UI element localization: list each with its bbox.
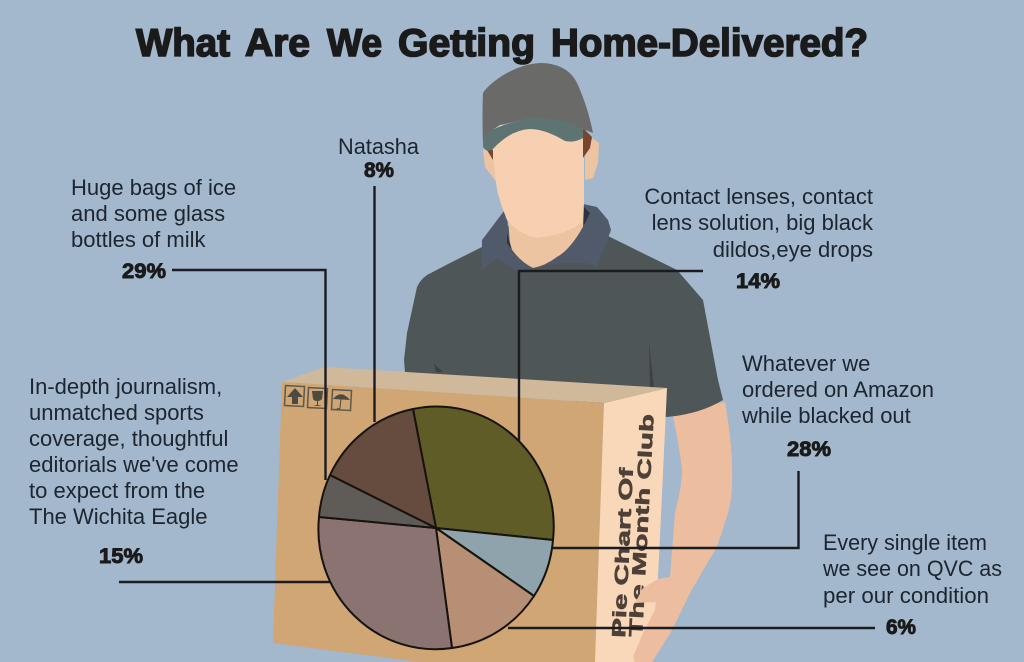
slice: mauve	[318, 517, 452, 649]
label: ice and milk	[71, 175, 236, 283]
delivery man illustration	[404, 63, 732, 662]
box handling icons	[284, 386, 352, 411]
box side label	[609, 413, 659, 638]
label: Amazon: 28%	[787, 438, 831, 461]
collar shadow	[507, 207, 590, 250]
cap	[482, 63, 593, 147]
shirt folds	[434, 342, 654, 388]
slice: brown	[330, 409, 436, 528]
title: Home-Delivered?	[551, 22, 868, 65]
label: QVC: we see on QVC as	[822, 556, 1002, 581]
label: QVC	[822, 530, 1002, 639]
label: ice and milk: Huge bags of ice	[71, 175, 236, 200]
label: Natasha	[338, 134, 420, 182]
label: journalism: to expect from the	[29, 478, 205, 503]
slice: blue	[436, 528, 553, 596]
icon: arrow up	[284, 386, 305, 407]
cap brim	[483, 118, 583, 151]
slice: tan	[436, 528, 534, 648]
icon: fragile glass	[307, 388, 328, 409]
label: QVC: per our condition	[823, 583, 989, 608]
label: Natasha: Natasha	[338, 134, 420, 159]
leader lines	[119, 186, 875, 628]
neck	[507, 200, 584, 268]
collar	[482, 204, 611, 272]
box top	[282, 367, 667, 403]
box side label: The Month Club	[626, 413, 659, 637]
label: journalism	[29, 374, 239, 568]
label: Amazon: while blacked out	[741, 403, 911, 428]
ears	[483, 138, 599, 183]
slice: olive	[413, 407, 554, 540]
label: Amazon: ordered on Amazon	[742, 377, 934, 402]
label: ice and milk: and some glass	[71, 201, 225, 226]
hand	[633, 577, 690, 662]
box front	[273, 382, 604, 662]
label: journalism: In-depth journalism,	[29, 374, 222, 399]
title: What	[136, 22, 230, 65]
label: Natasha: 8%	[364, 159, 394, 182]
right arm	[600, 402, 732, 662]
title: Are	[245, 22, 310, 65]
icon: umbrella	[331, 390, 352, 411]
box side	[595, 388, 667, 662]
title	[136, 22, 868, 65]
shirt	[404, 225, 723, 417]
title: We	[327, 22, 382, 65]
label: contact lenses: Contact lenses, contact	[644, 184, 873, 209]
label: Amazon: Whatever we	[742, 351, 870, 376]
label: contact lenses: dildos,eye drops	[713, 237, 873, 262]
face	[490, 125, 584, 238]
label: contact lenses	[644, 184, 874, 262]
label: QVC: 6%	[886, 616, 916, 639]
slice: grey	[319, 475, 436, 528]
label: ice and milk: bottles of milk	[71, 227, 206, 252]
label: journalism: 15%	[99, 545, 143, 568]
percent: contact lenses: 14%	[736, 270, 780, 293]
cardboard box	[273, 367, 667, 662]
label: journalism: The Wichita Eagle	[29, 504, 208, 529]
hair	[487, 128, 592, 160]
label: Amazon	[741, 351, 934, 461]
label: journalism: editorials we've come	[29, 452, 239, 477]
label: journalism: coverage, thoughtful	[29, 426, 228, 451]
label: contact lenses: lens solution, big black	[652, 210, 874, 235]
label: QVC: Every single item	[823, 530, 987, 555]
label: ice and milk: 29%	[122, 260, 166, 283]
title: Getting	[398, 22, 535, 65]
label: journalism: unmatched sports	[29, 400, 204, 425]
box side label: Pie Chart Of	[609, 466, 638, 638]
pie chart	[318, 407, 554, 649]
